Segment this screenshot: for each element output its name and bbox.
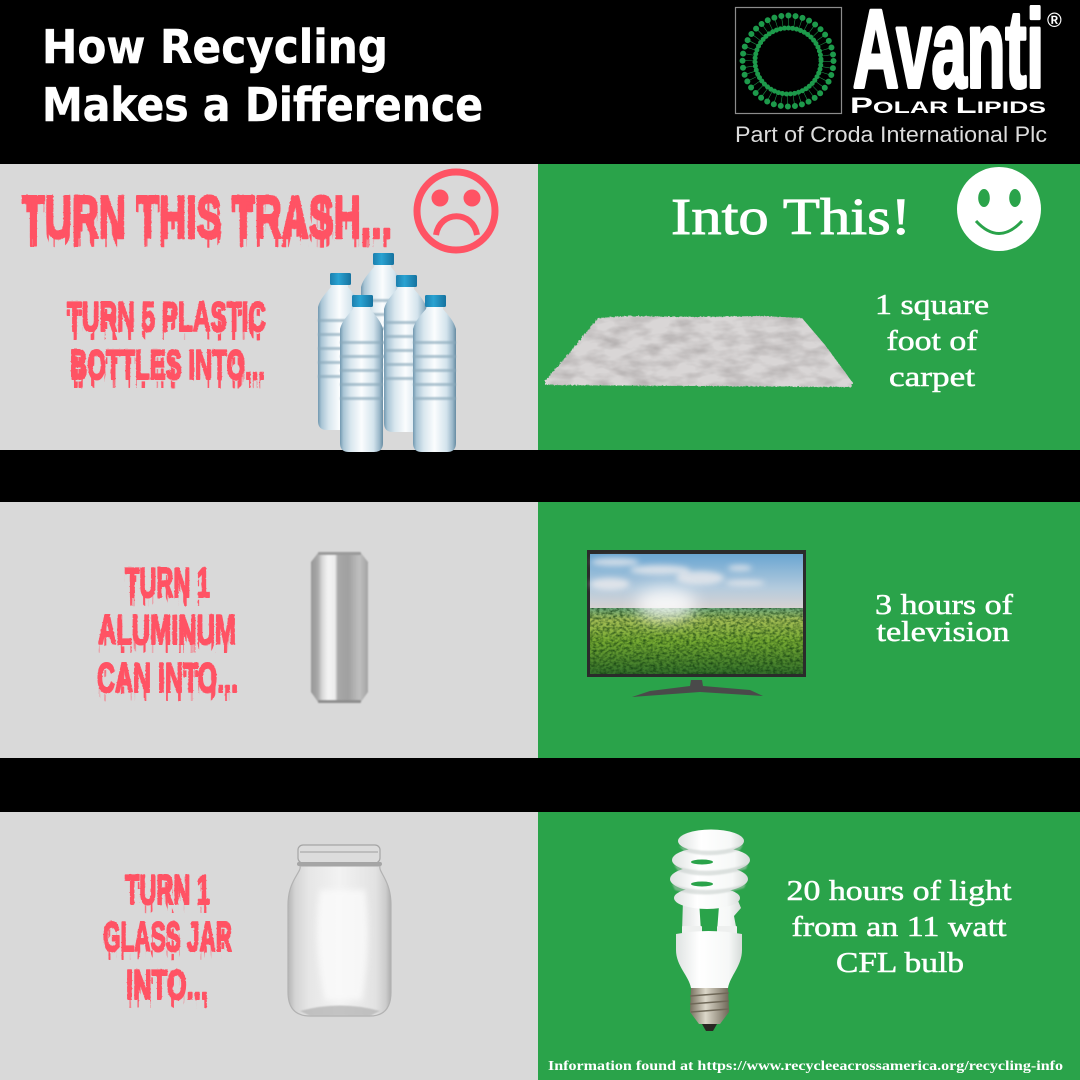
header: black title band xyxy=(0,0,1080,164)
text: 1 square foot of carpet: 1 square xyxy=(875,289,989,321)
title: How Recycling xyxy=(42,20,388,74)
panel: result side, light bulb xyxy=(538,812,1080,1080)
logo registered mark: ® xyxy=(1047,10,1062,32)
image: glass jar xyxy=(288,845,391,1016)
text: 1 square foot of carpet: carpet xyxy=(889,361,975,393)
image: carpet xyxy=(545,316,853,387)
source note: Information found at https://www.recycleeacrossamerica.org/recycling-info xyxy=(548,1059,1063,1074)
panel: result side, carpet xyxy=(538,164,1080,450)
panel: trash side, aluminum can xyxy=(0,502,538,758)
image: aluminum can xyxy=(311,552,368,703)
title xyxy=(42,20,483,132)
text: 20 hours of light from an 11 watt cfl bulb: from an 11 watt xyxy=(792,911,1006,943)
icon: sad face xyxy=(417,172,495,250)
text: turn 1 glass jar into: GLASS JAR xyxy=(103,913,232,960)
text: turn 1 glass jar into: TURN 1 xyxy=(125,866,210,913)
panel: result side, television xyxy=(538,502,1080,758)
text: turn 5 plastic bottles into: BOTTLES INTO... xyxy=(70,341,265,388)
panel: trash side, plastic bottles xyxy=(0,164,538,450)
text: turn 1 aluminum can into: TURN 1 xyxy=(125,559,210,606)
television stand xyxy=(632,680,763,697)
image: plastic bottles xyxy=(318,253,456,452)
image: television xyxy=(587,550,806,697)
text: 1 square foot of carpet: foot of xyxy=(886,325,978,357)
logo tagline: Part of Croda International Plc xyxy=(735,122,1047,147)
text: turn 5 plastic bottles into xyxy=(67,293,266,388)
logo subtitle: P OLAR L IPIDS xyxy=(850,93,1046,118)
text: turn 1 glass jar into: INTO... xyxy=(126,961,208,1008)
panel: trash side, glass jar xyxy=(0,812,538,1080)
text: 20 hours of light from an 11 watt cfl bulb: CFL bulb xyxy=(836,947,964,979)
text: 3 hours of television xyxy=(875,589,1013,648)
logo icon: lipid ring in square xyxy=(736,8,842,114)
text: turn 5 plastic bottles into: TURN 5 PLASTIC xyxy=(67,293,266,340)
logo: Avanti Polar Lipids xyxy=(735,0,1062,147)
text: 20 hours of light from an 11 watt cfl bulb xyxy=(786,875,1012,979)
text: turn 1 aluminum can into xyxy=(97,559,238,701)
image: cfl bulb xyxy=(670,830,750,1031)
text: 3 hours of television: television xyxy=(876,616,1010,648)
heading: into this: Into This! xyxy=(671,189,911,246)
text: 20 hours of light from an 11 watt cfl bulb: 20 hours of light xyxy=(786,875,1012,907)
icon: happy face xyxy=(957,167,1041,251)
text: 1 square foot of carpet xyxy=(875,289,989,393)
text: 3 hours of television: 3 hours of xyxy=(875,589,1013,621)
text: turn 1 aluminum can into: ALUMINUM xyxy=(98,606,236,653)
heading: turn this trash: TURN THIS TRASH... xyxy=(22,184,392,251)
title: Makes a Difference xyxy=(42,78,483,132)
text: turn 1 glass jar into xyxy=(103,866,232,1008)
text: turn 1 aluminum can into: CAN INTO... xyxy=(97,654,238,701)
